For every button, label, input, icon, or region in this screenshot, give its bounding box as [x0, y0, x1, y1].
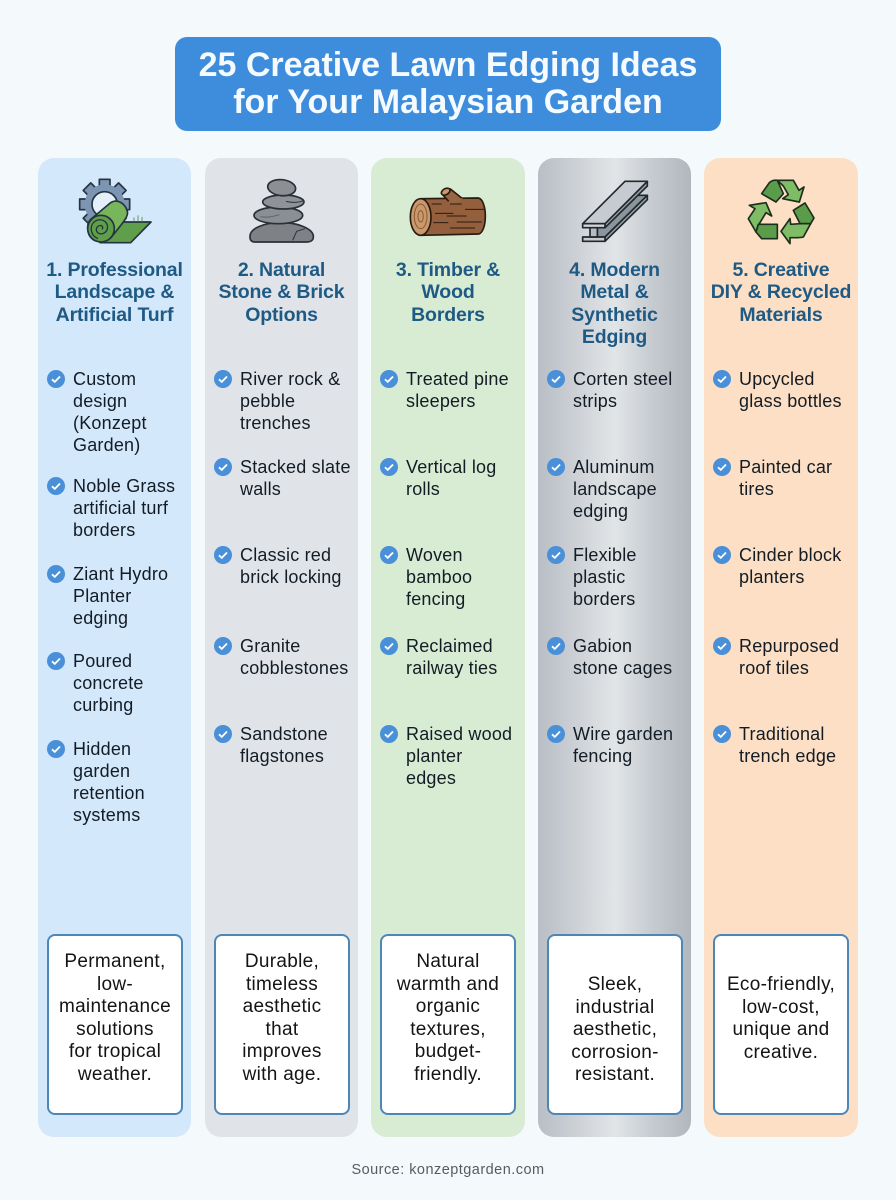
panel: timber and wood: [371, 158, 525, 1137]
heading: 1. Professional: [46, 258, 183, 280]
list item: [214, 545, 342, 587]
panel: timber and wood: planter: [406, 746, 462, 766]
panel: modern metal and synthetic: landscape: [573, 479, 657, 499]
list item: [47, 476, 175, 540]
panel: professional landscape and artificial turf: systems: [73, 805, 140, 825]
panel: professional landscape and artificial turf: curbing: [73, 695, 133, 715]
list item: [380, 369, 509, 411]
icon: stacked stones: [249, 178, 314, 243]
panel: timber and wood: rolls: [406, 479, 440, 499]
panel: professional landscape and artificial turf: Hidden: [73, 739, 131, 759]
panel: timber and wood: sleepers: [406, 391, 476, 411]
panel: professional landscape and artificial turf: [38, 158, 191, 1137]
summary box: that: [266, 1018, 298, 1040]
title: [175, 37, 721, 131]
panel: creative DIY and recycled: trench edge: [739, 746, 836, 766]
panel: modern metal and synthetic: [538, 158, 691, 1137]
panel: natural stone and brick: flagstones: [240, 746, 324, 766]
list item: [713, 724, 836, 766]
heading: Borders: [411, 304, 485, 326]
summary box: Eco-friendly,: [727, 974, 835, 995]
panel: creative DIY and recycled: glass bottles: [739, 391, 842, 411]
heading: [569, 258, 660, 348]
heading: Options: [245, 304, 318, 326]
panel: creative DIY and recycled: Repurposed: [739, 636, 839, 656]
list item: [547, 369, 672, 411]
panel: professional landscape and artificial turf: borders: [73, 520, 135, 540]
summary box: warmth and: [397, 974, 499, 994]
panel: modern metal and synthetic: strips: [573, 391, 617, 411]
heading: [219, 258, 344, 326]
panel: professional landscape and artificial turf: edging: [73, 608, 128, 628]
heading: Materials: [739, 304, 823, 326]
source line: Source: konzeptgarden.com: [351, 1162, 545, 1178]
heading: [711, 258, 851, 326]
panel: modern metal and synthetic: Corten steel: [573, 369, 672, 389]
panel: timber and wood: fencing: [406, 589, 465, 609]
panel: professional landscape and artificial turf: Noble Grass: [73, 476, 175, 496]
panel: timber and wood: Reclaimed: [406, 636, 493, 656]
list item: [380, 457, 496, 499]
panel: timber and wood: railway ties: [406, 658, 497, 678]
title: 25 Creative Lawn Edging Ideas: [199, 46, 697, 84]
panel: natural stone and brick: walls: [240, 479, 281, 499]
panel: modern metal and synthetic: stone cages: [573, 658, 672, 678]
heading: Artificial Turf: [56, 304, 173, 326]
list item: [713, 457, 832, 499]
heading: 4. Modern: [569, 258, 660, 280]
panel: creative DIY and recycled: planters: [739, 567, 805, 587]
list item: [547, 545, 637, 609]
panel: timber and wood: Woven: [406, 545, 463, 565]
panel: timber and wood: Treated pine: [406, 369, 509, 389]
heading: Synthetic: [571, 304, 658, 326]
panel: creative DIY and recycled: tires: [739, 479, 774, 499]
heading: Stone & Brick: [219, 281, 344, 303]
icon: log: [410, 187, 486, 236]
panel: professional landscape and artificial turf: Poured: [73, 651, 132, 671]
summary box: Natural: [416, 951, 480, 972]
panel: creative DIY and recycled: Upcycled: [739, 369, 815, 389]
summary box: Permanent,: [64, 951, 166, 972]
panel: modern metal and synthetic: plastic: [573, 567, 625, 587]
heading: Wood: [421, 281, 475, 303]
list item: [547, 636, 672, 678]
panel: professional landscape and artificial turf: Ziant Hydro: [73, 564, 168, 584]
summary box: weather.: [78, 1064, 152, 1084]
panel: modern metal and synthetic: edging: [573, 501, 628, 521]
icon: steel I-beam: [582, 180, 648, 242]
panel: natural stone and brick: River rock &: [240, 369, 340, 389]
list item: [380, 545, 472, 609]
heading: [396, 258, 500, 326]
panel: timber and wood: edges: [406, 768, 456, 788]
list item: [214, 636, 348, 678]
panel: professional landscape and artificial turf: Garden): [73, 435, 140, 455]
summary box: budget-: [415, 1041, 481, 1062]
summary box: [547, 934, 683, 1115]
list item: [214, 724, 328, 766]
summary box: [214, 934, 350, 1115]
summary box: improves: [242, 1041, 322, 1062]
list item: [713, 545, 842, 587]
list item: [713, 369, 842, 411]
panel: professional landscape and artificial turf: concrete: [73, 673, 144, 693]
heading: DIY & Recycled: [711, 281, 851, 303]
summary box: solutions: [76, 1018, 154, 1040]
panel: timber and wood: bamboo: [406, 567, 472, 587]
list item: [380, 636, 497, 678]
panel: natural stone and brick: Classic red: [240, 545, 331, 565]
list item: [47, 564, 168, 628]
summary box: industrial: [575, 996, 655, 1018]
summary box: [713, 934, 849, 1115]
title: for Your Malaysian Garden: [233, 83, 663, 121]
summary box: friendly.: [414, 1064, 482, 1084]
summary box: [47, 934, 183, 1115]
list item: [47, 369, 147, 455]
summary box: Sleek,: [588, 974, 642, 995]
panel: timber and wood: Vertical log: [406, 457, 496, 477]
list item: [713, 636, 839, 678]
heading: [46, 258, 183, 326]
summary box: [380, 934, 516, 1115]
heading: Metal &: [580, 281, 649, 303]
panel: modern metal and synthetic: Aluminum: [573, 457, 655, 477]
panel: modern metal and synthetic: Wire garden: [573, 724, 673, 744]
panel: natural stone and brick: Stacked slate: [240, 457, 351, 477]
summary box: aesthetic: [243, 996, 321, 1017]
list item: [547, 724, 673, 766]
panel: creative DIY and recycled: Painted car: [739, 457, 832, 477]
panel: creative DIY and recycled: [704, 158, 858, 1137]
heading: 3. Timber &: [396, 258, 500, 280]
panel: professional landscape and artificial turf: Custom: [73, 369, 136, 389]
panel: professional landscape and artificial turf: (Konzept: [73, 413, 147, 433]
panel: creative DIY and recycled: Cinder block: [739, 545, 841, 565]
heading: 5. Creative: [732, 258, 830, 280]
summary box: unique and: [732, 1019, 830, 1040]
summary box: timeless: [246, 974, 318, 994]
panel: natural stone and brick: cobblestones: [240, 658, 348, 678]
panel: modern metal and synthetic: borders: [573, 589, 635, 609]
panel: natural stone and brick: pebble: [240, 391, 295, 411]
summary box: low-cost,: [742, 996, 820, 1018]
panel: creative DIY and recycled: Traditional: [739, 724, 825, 744]
summary box: low-: [97, 974, 133, 994]
panel: professional landscape and artificial turf: retention: [73, 783, 145, 803]
summary box: creative.: [744, 1042, 818, 1062]
panel: modern metal and synthetic: Flexible: [573, 545, 637, 565]
heading: 2. Natural: [238, 258, 325, 280]
panel: professional landscape and artificial turf: garden: [73, 761, 130, 781]
panel: natural stone and brick: [205, 158, 358, 1137]
summary box: maintenance: [59, 996, 171, 1017]
list item: [380, 724, 512, 788]
panel: natural stone and brick: Granite: [240, 636, 300, 656]
summary box: for tropical: [69, 1041, 161, 1062]
heading: Landscape &: [55, 281, 174, 303]
panel: natural stone and brick: Sandstone: [240, 724, 328, 744]
list item: [214, 457, 351, 499]
panel: modern metal and synthetic: Gabion: [573, 636, 632, 656]
list item: [47, 739, 145, 825]
list item: [547, 457, 657, 521]
panel: natural stone and brick: trenches: [240, 413, 311, 433]
summary box: with age.: [243, 1064, 321, 1084]
panel: professional landscape and artificial turf: artificial turf: [73, 498, 168, 518]
list item: [214, 369, 340, 433]
panel: professional landscape and artificial turf: design: [73, 391, 127, 411]
summary box: organic: [416, 996, 480, 1017]
panel: timber and wood: Raised wood: [406, 724, 512, 744]
heading: Edging: [582, 326, 647, 348]
summary box: corrosion-: [571, 1042, 659, 1062]
summary box: textures,: [410, 1018, 486, 1040]
summary box: Durable,: [245, 951, 319, 972]
panel: modern metal and synthetic: fencing: [573, 746, 632, 766]
summary box: resistant.: [575, 1064, 655, 1085]
panel: natural stone and brick: brick locking: [240, 567, 342, 587]
panel: creative DIY and recycled: roof tiles: [739, 658, 809, 678]
summary box: aesthetic,: [573, 1019, 657, 1040]
list item: [47, 651, 144, 715]
panel: professional landscape and artificial turf: Planter: [73, 586, 131, 606]
icon: recycling arrows: [748, 179, 815, 244]
icon: gear and turf roll: [78, 178, 152, 244]
